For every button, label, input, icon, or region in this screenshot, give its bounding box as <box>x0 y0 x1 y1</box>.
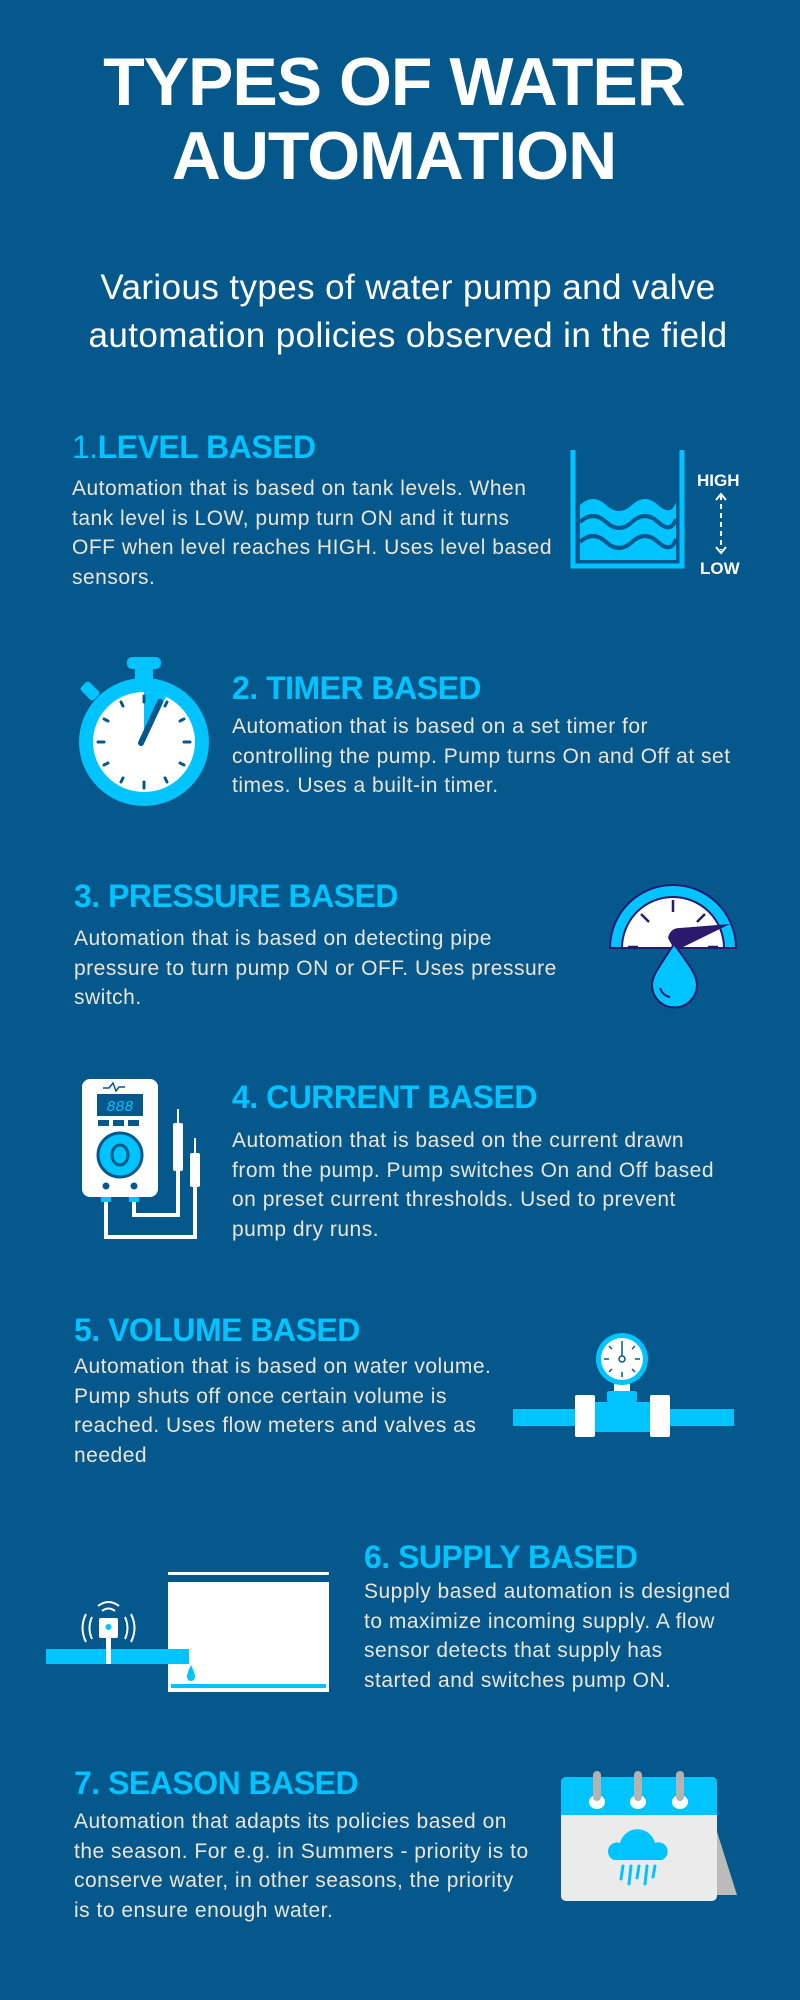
section 2 text: Automation that is based on a set timer for <box>232 715 648 738</box>
icon: supply tank with sensor <box>46 1572 329 1692</box>
section 3 text <box>74 927 557 1009</box>
section 4 heading: 4. CURRENT BASED <box>232 1079 537 1115</box>
section 3 text: pressure to turn pump ON or OFF. Uses pressure <box>74 956 557 980</box>
section 3 text: switch. <box>74 986 142 1009</box>
section 2 heading: 2. TIMER BASED <box>232 670 481 706</box>
section 4 text: on preset current thresholds. Used to prevent <box>232 1188 676 1211</box>
section 7 text: the season. For e.g. in Summers - priority is to <box>74 1840 529 1862</box>
title: TYPES OF WATER <box>103 44 685 120</box>
section 7 text: conserve water, in other seasons, the priority <box>74 1869 514 1892</box>
section 5 heading: 5. VOLUME BASED <box>74 1312 360 1348</box>
section 4 text: pump dry runs. <box>232 1218 379 1240</box>
section 2 text: times. Uses a built-in timer. <box>232 774 499 797</box>
section 5 text <box>74 1355 491 1466</box>
section 2 text: controlling the pump. Pump turns On and Off at set <box>232 744 731 768</box>
subtitle: automation policies observed in the field <box>88 316 728 355</box>
section 1 text: Automation that is based on tank levels. When <box>72 477 526 500</box>
section 6 text: to maximize incoming supply. A flow <box>364 1610 715 1632</box>
icon: flow meter pipe <box>513 1333 734 1437</box>
subtitle: Various types of water pump and valve <box>100 268 716 307</box>
icon: multimeter: 888 <box>106 1099 134 1116</box>
section 5 text: reached. Uses flow meters and valves as <box>74 1414 476 1437</box>
section 6 heading: 6. SUPPLY BASED <box>364 1539 638 1575</box>
section 6 text: sensor detects that supply has <box>364 1639 663 1662</box>
section 7 text <box>74 1810 529 1922</box>
section 1 text: tank level is LOW, pump turn ON and it turns <box>72 506 510 530</box>
section 7 text: Automation that adapts its policies based on <box>74 1810 507 1833</box>
section 6 text <box>364 1580 731 1692</box>
section 3 heading: 3. PRESSURE BASED <box>74 878 398 914</box>
icon: tank level: HIGH <box>697 471 740 490</box>
section 1 heading: 1.LEVEL BASED <box>72 429 316 465</box>
section 6 text: Supply based automation is designed <box>364 1580 731 1603</box>
section 1 text: OFF when level reaches HIGH. Uses level based <box>72 536 552 559</box>
icon: multimeter <box>82 1079 200 1239</box>
title: AUTOMATION <box>172 118 616 194</box>
section 5 text: Automation that is based on water volume. <box>74 1355 491 1378</box>
section 4 text <box>232 1129 714 1240</box>
title <box>103 44 685 194</box>
icon: pressure gauge <box>609 884 737 1008</box>
icon: tank level <box>570 450 741 575</box>
icon: stopwatch <box>79 657 209 806</box>
icon: calendar rain <box>561 1771 737 1901</box>
section 7 heading: 7. SEASON BASED <box>74 1765 358 1801</box>
section 5 text: needed <box>74 1444 147 1466</box>
section 6 text: started and switches pump ON. <box>364 1668 671 1692</box>
section 3 text: Automation that is based on detecting pipe <box>74 927 492 950</box>
subtitle <box>88 268 728 355</box>
section 5 text: Pump shuts off once certain volume is <box>74 1384 447 1408</box>
section 1 text <box>72 477 552 588</box>
section 1 text: sensors. <box>72 566 155 588</box>
section 4 text: Automation that is based on the current drawn <box>232 1129 684 1152</box>
section 7 text: is to ensure enough water. <box>74 1898 333 1922</box>
section 2 text <box>232 715 731 797</box>
section 4 text: from the pump. Pump switches On and Off based <box>232 1158 714 1182</box>
